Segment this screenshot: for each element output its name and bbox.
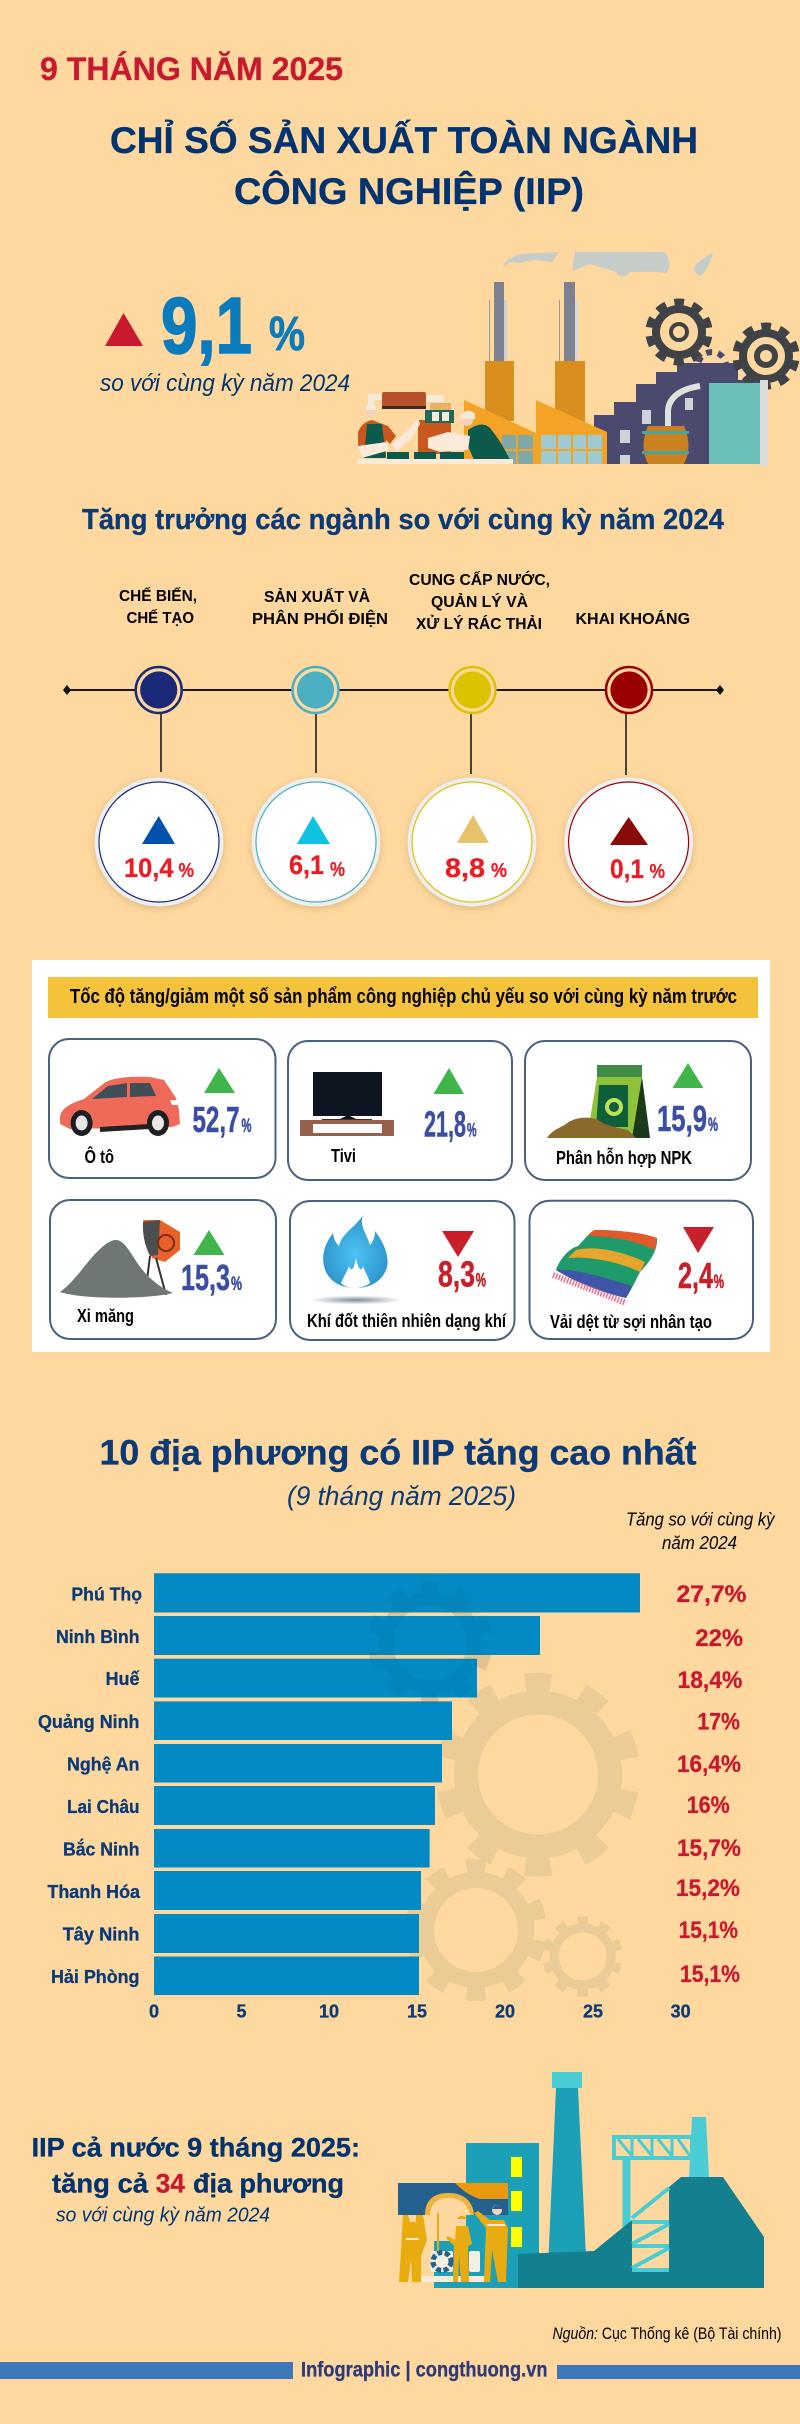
callout: 34 localities: IIP cả nước 9 tháng 2025: [32,2133,360,2163]
locality names: Tây Ninh [63,1924,140,1945]
arch [398,2183,508,2251]
axis line with end diamonds [63,685,724,695]
axis labels [149,2002,691,2022]
value: 21,8 [424,1104,466,1145]
locality names: Lai Châu [67,1796,140,1817]
arrow: up [204,1068,235,1093]
card: cars +52,7% [49,1039,276,1178]
value circle: 8,8% [408,778,536,908]
value circle: 8,8%: 8,8 [445,853,485,883]
column note: năm 2024 [662,1533,737,1553]
comparison note: so với cùng kỳ năm 2024 [100,370,350,397]
value circle: 10,4%: 10,4 [124,853,174,883]
arrow: up [672,1063,704,1088]
values: 15,1% [680,1961,740,1988]
gears [649,302,796,386]
locality names: Hải Phòng [51,1966,140,1987]
title [110,119,698,212]
values: 17% [697,1708,740,1736]
sector label: processing [119,586,197,627]
locality names: Huế [106,1668,140,1689]
heading: top 10 localities: 10 địa phương có IIP tăng cao nhất [100,1434,697,1473]
value: 15,9 [657,1098,707,1139]
card: synthetic fabric -2,4% [530,1201,753,1339]
barrel [642,426,689,464]
value: 9,1 [161,281,252,370]
sector label: processing: CHẾ TẠO [126,608,194,627]
card: NPK fertilizer +15,9% [525,1041,751,1180]
axis labels: 20 [495,2002,515,2022]
arrow: up [194,1230,224,1255]
sector label: electricity: PHÂN PHỐI ĐIỆN [252,608,388,628]
values: 16% [687,1792,730,1819]
chimneys [485,282,585,431]
card: natural gas -8,3% [290,1201,514,1340]
value circle: 6,1% [252,778,380,908]
node: navy [136,667,182,713]
chimney [548,2072,586,2256]
locality names: Bắc Ninh [63,1839,140,1860]
value circle: 10,4% [94,778,224,908]
orange sheds [464,400,607,464]
value circle: 0,1%: 0,1 [610,854,644,884]
illustration: industrial plant and workers [398,2072,764,2288]
card: cement +15,3% [50,1200,276,1339]
callout: 34 localities: 34 [156,2169,185,2199]
worker left [399,2215,427,2282]
illustration: factory and workers [357,252,796,466]
value circle: 10,4%: % [178,860,194,882]
value: 2,4 [678,1255,713,1296]
locality names: Nghệ An [67,1754,140,1775]
label: Phân hỗn hợp NPK [556,1147,692,1168]
sector label: electricity: SẢN XUẤT VÀ [264,587,370,606]
value: % [714,1272,724,1293]
machine [368,392,454,454]
headline figure: 9,1% [100,281,350,397]
footer bar [0,2359,800,2382]
axis labels: 15 [407,2002,427,2022]
period label: 9 THÁNG NĂM 2025 [40,51,343,87]
icon: up triangle [105,313,143,346]
node: yellow [450,667,496,713]
teal tank and pipe [668,380,768,466]
icon: television [300,1072,394,1136]
smoke [503,252,713,276]
heading: top 10 localities [100,1434,697,1511]
node: cyan [292,667,338,713]
icon: cement pile and mixer [60,1220,180,1298]
callout: 34 localities: tăng cả [52,2169,149,2199]
arrow: down [442,1231,474,1257]
label: Ô tô [84,1146,114,1167]
bar chart: top 10 localities [38,1573,746,2022]
background gears [374,1587,631,1994]
bars [154,1573,640,1995]
values: 18,4% [678,1667,742,1694]
worker right [428,410,510,460]
values: 22% [695,1625,743,1652]
icon: car [60,1077,180,1136]
axis labels: 0 [149,2002,159,2022]
title: CÔNG NGHIỆP (IIP) [234,170,584,212]
panel: key industrial products [32,960,770,1352]
value circle: 0,1% [564,778,693,908]
sector label: water and waste: XỬ LÝ RÁC THẢI [416,614,542,633]
values: 15,2% [676,1875,740,1902]
sector label: electricity [252,587,388,628]
locality names [38,1584,142,1987]
callout: 34 localities: so với cùng kỳ năm 2024 [56,2205,270,2227]
values: 15,7% [677,1835,741,1862]
windows of dark building [620,398,693,464]
timeline: four sectors [63,570,724,908]
value circle: 8,8%: % [491,860,507,882]
value circle: 6,1%: 6,1 [289,850,324,880]
node: dark red [606,667,652,713]
icon: folded fabric [553,1230,657,1303]
column note: Tăng so với cùng kỳ [626,1510,775,1530]
values [676,1581,746,1988]
sector label: water and waste: QUẢN LÝ VÀ [431,592,528,611]
panel heading [48,977,758,1018]
locality names: Ninh Bình [56,1626,140,1647]
value: 52,7 [192,1099,240,1140]
percent sign: % [269,308,305,361]
value circle: 6,1%: % [330,859,345,881]
worker middle [446,2216,472,2282]
card: television +21,8% [288,1041,512,1180]
value: % [708,1115,718,1136]
building [434,2143,539,2288]
axis labels: 10 [319,2002,339,2022]
sector label: processing: CHẾ BIẾN, [119,586,197,605]
values: 27,7% [676,1581,746,1608]
values: 16,4% [677,1751,741,1778]
callout: 34 localities: địa phương [193,2169,344,2199]
heading: sector growth: Tăng trưởng các ngành so với cùng kỳ năm 2024 [82,504,724,536]
heading: top 10 localities: (9 tháng năm 2025) [287,1481,516,1511]
icon: blue flame [310,1213,402,1304]
worker right [474,2205,508,2282]
crane mast [689,2117,709,2178]
sector label: water and waste [409,570,550,633]
value circle: 0,1%: % [650,861,665,883]
faint gear overlay on bars [374,1587,486,1699]
value: % [231,1274,242,1295]
dark stepped building [594,363,760,464]
arrow: up [434,1068,464,1094]
value: 15,3 [181,1257,230,1298]
sector label: mining: KHAI KHOÁNG [576,609,690,628]
value: % [242,1116,252,1137]
arrow: down [683,1227,714,1253]
values: 15,1% [679,1917,738,1944]
worker left [358,404,420,458]
label: Tivi [331,1146,356,1166]
value: % [476,1271,486,1292]
label: Khí đốt thiên nhiên dạng khí [307,1311,507,1331]
value: % [467,1121,477,1142]
axis labels: 25 [583,2002,603,2022]
sector label: water and waste: CUNG CẤP NƯỚC, [409,570,550,589]
locality names: Thanh Hóa [47,1881,141,1902]
axis labels: 5 [236,2002,247,2022]
value: 8,3 [438,1254,475,1295]
fan boxes [421,2241,485,2282]
locality names: Quảng Ninh [38,1711,140,1732]
crane [614,2137,692,2254]
connector lines [161,714,626,775]
title: CHỈ SỐ SẢN XUẤT TOÀN NGÀNH [110,119,698,161]
table and trays [357,452,513,464]
label: Vải dệt từ sợi nhân tạo [550,1312,712,1332]
icon: fertilizer bag [547,1065,650,1138]
label: Xi măng [77,1306,134,1326]
hill block with lattice opening [518,2177,764,2288]
callout: 34 localities [32,2133,360,2227]
small cog on roof [698,352,726,380]
column note [626,1510,775,1553]
footer bar: Infographic | congthuong.vn [301,2359,548,2382]
axis labels: 30 [671,2002,691,2022]
locality names: Phú Thọ [71,1584,142,1605]
